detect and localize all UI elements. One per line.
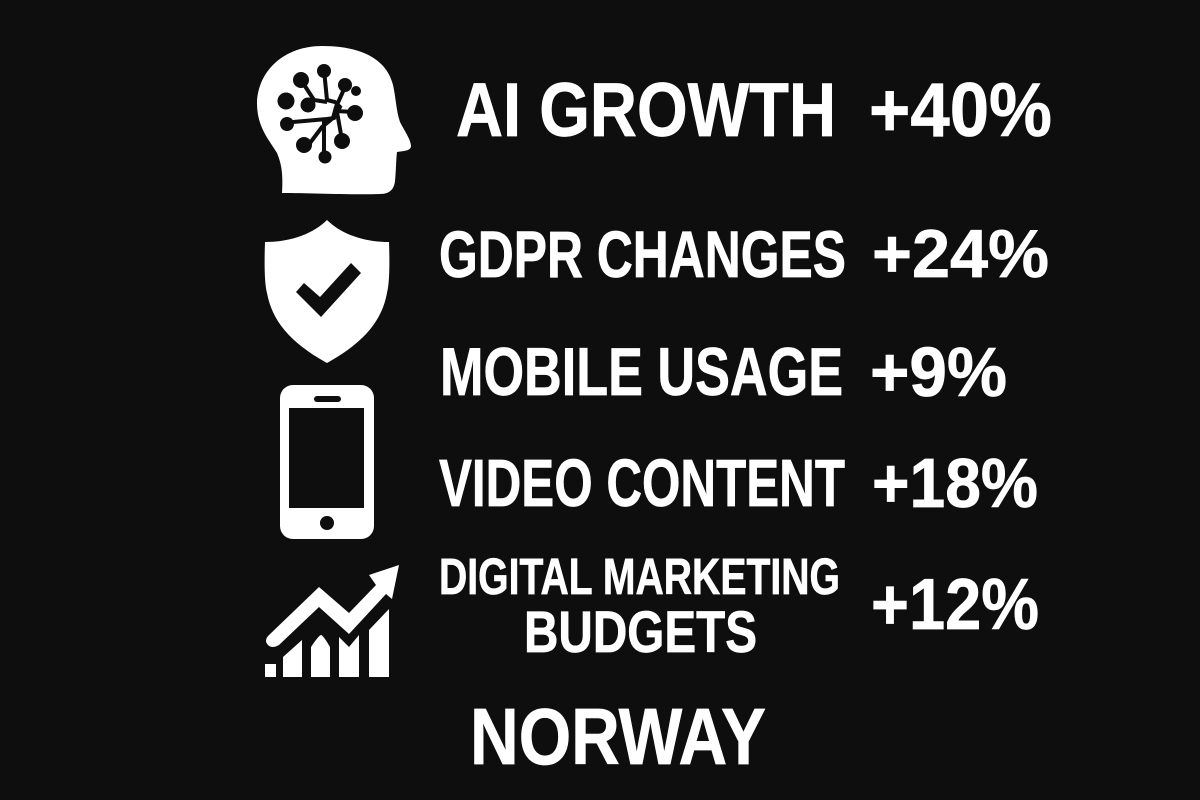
title: Norway: NORWAY: [470, 692, 766, 781]
icon: AI head: [257, 46, 411, 194]
icon: growth chart: [265, 565, 399, 677]
label: GDPR changes: GDPR CHANGES: [439, 217, 846, 291]
label: digital marketing budgets: BUDGETS: [524, 600, 757, 665]
value: +18%: +18%: [872, 444, 1038, 522]
value: +12%: +12%: [871, 565, 1039, 645]
label: AI growth: AI GROWTH: [456, 68, 836, 153]
icon: shield with check: [265, 220, 389, 363]
icon: smartphone: [280, 385, 374, 539]
value: +40%: +40%: [869, 68, 1052, 153]
label: digital marketing budgets: [439, 548, 840, 665]
label: digital marketing budgets: DIGITAL MARKETING: [439, 548, 840, 605]
label: video content: VIDEO CONTENT: [439, 446, 845, 521]
value: +9%: +9%: [870, 333, 1007, 411]
value: +24%: +24%: [872, 216, 1049, 292]
label: mobile usage: MOBILE USAGE: [440, 334, 843, 410]
